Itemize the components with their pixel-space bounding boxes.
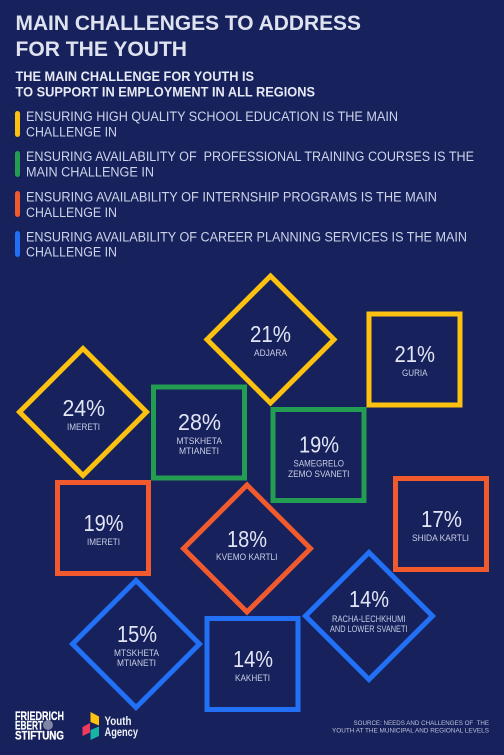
region: Imereti 19%: IMERETI [87, 537, 120, 548]
region: Shida Kartli [396, 478, 486, 570]
region: Imereti 24%: IMERETI [67, 422, 100, 433]
region: Kvemo Kartli [184, 485, 310, 612]
logo: Friedrich Ebert Stiftung: STIFTUNG [15, 730, 64, 742]
region: Mtskheta Mtianeti 15%: MTSKHETA [114, 648, 160, 659]
region: Kvemo Kartli: 18% [227, 526, 267, 552]
legend item: career planning: ENSURING AVAILABILITY OF CAREER PLANNING SERVICES IS THE MAIN [26, 230, 467, 244]
region: Mtskheta Mtianeti 28%: MTSKHETA [176, 436, 223, 447]
legend item: internship programs [15, 190, 437, 220]
region: Kakheti [207, 618, 298, 710]
region: Adjara [207, 276, 334, 403]
region: Shida Kartli: SHIDA KARTLI [412, 533, 469, 544]
region: Mtskheta Mtianeti 28% [154, 387, 244, 478]
title: MAIN CHALLENGES TO ADDRESS [16, 12, 361, 35]
logo: Friedrich Ebert Stiftung: EBERT [15, 720, 43, 732]
logo: Friedrich Ebert Stiftung: FRIEDRICH [15, 711, 64, 723]
region: Guria: 21% [394, 341, 435, 367]
region: Samegrelo Zemo Svaneti: ZEMO SVANETI [288, 469, 350, 480]
title: FOR THE YOUTH [16, 38, 187, 61]
region: Racha-Lechkhumi and Lower Svaneti: 14% [349, 586, 389, 612]
legend item: internship programs: CHALLENGE IN [26, 205, 117, 220]
region: Guria: GURIA [402, 368, 428, 379]
region: Mtskheta Mtianeti 15%: MTIANETI [117, 658, 156, 669]
region: Racha-Lechkhumi and Lower Svaneti: RACHA-LECHKHUMI [332, 614, 406, 625]
legend item: career planning: CHALLENGE IN [26, 244, 117, 260]
region: Kakheti: KAKHETI [235, 673, 270, 684]
legend item: career planning [15, 230, 467, 260]
region: Kvemo Kartli: KVEMO KARTLI [216, 552, 278, 563]
region: Mtskheta Mtianeti 15%: 15% [117, 621, 157, 647]
region: Guria [369, 314, 460, 405]
icon: logo mark [82, 712, 99, 740]
region: Mtskheta Mtianeti 28%: MTIANETI [179, 446, 219, 457]
source note [332, 720, 490, 734]
legend item: school education: CHALLENGE IN [26, 124, 117, 140]
legend [15, 109, 474, 260]
region: Imereti 24%: 24% [62, 395, 105, 421]
subtitle: THE MAIN CHALLENGE FOR YOUTH IS [16, 68, 254, 84]
region: Samegrelo Zemo Svaneti: SAMEGRELO [294, 458, 344, 470]
logo: Youth Agency: Youth [104, 716, 132, 728]
region: Imereti 24% [20, 348, 146, 476]
legend item: professional training [15, 149, 474, 180]
logo: Friedrich Ebert Stiftung [15, 711, 64, 742]
region: Imereti 19%: 19% [84, 510, 124, 536]
legend item: school education: ENSURING HIGH QUALITY SCHOOL EDUCATION IS THE MAIN [26, 109, 398, 124]
legend item: school education [15, 109, 398, 140]
region: Imereti 19% [58, 482, 148, 574]
region: Adjara: 21% [250, 321, 291, 347]
legend item: professional training: ENSURING AVAILABILITY OF PROFESSIONAL TRAINING COURSES IS THE [26, 149, 474, 164]
source note: SOURCE: NEEDS AND CHALLENGES OF THE [354, 720, 490, 727]
region: Samegrelo Zemo Svaneti [273, 410, 364, 500]
region: Adjara: ADJARA [254, 348, 288, 359]
region: Racha-Lechkhumi and Lower Svaneti: AND LOWER SVANETI [330, 624, 408, 635]
title [16, 12, 361, 61]
subtitle: TO SUPPORT IN EMPLOYMENT IN ALL REGIONS [16, 84, 315, 100]
region: Racha-Lechkhumi and Lower Svaneti [306, 552, 432, 680]
region: Mtskheta Mtianeti 28%: 28% [178, 409, 221, 435]
logo: Youth Agency [82, 712, 138, 740]
region: Shida Kartli: 17% [421, 506, 462, 532]
region: Mtskheta Mtianeti 15% [72, 580, 200, 708]
logo: Youth Agency: Agency [104, 727, 138, 739]
subtitle [16, 68, 315, 100]
legend item: professional training: MAIN CHALLENGE IN [26, 164, 154, 180]
legend item: internship programs: ENSURING AVAILABILITY OF INTERNSHIP PROGRAMS IS THE MAIN [26, 190, 437, 204]
source note: YOUTH AT THE MUNICIPAL AND REGIONAL LEVELS [332, 728, 490, 734]
region: Kakheti: 14% [233, 646, 273, 672]
region: Samegrelo Zemo Svaneti: 19% [299, 432, 339, 458]
